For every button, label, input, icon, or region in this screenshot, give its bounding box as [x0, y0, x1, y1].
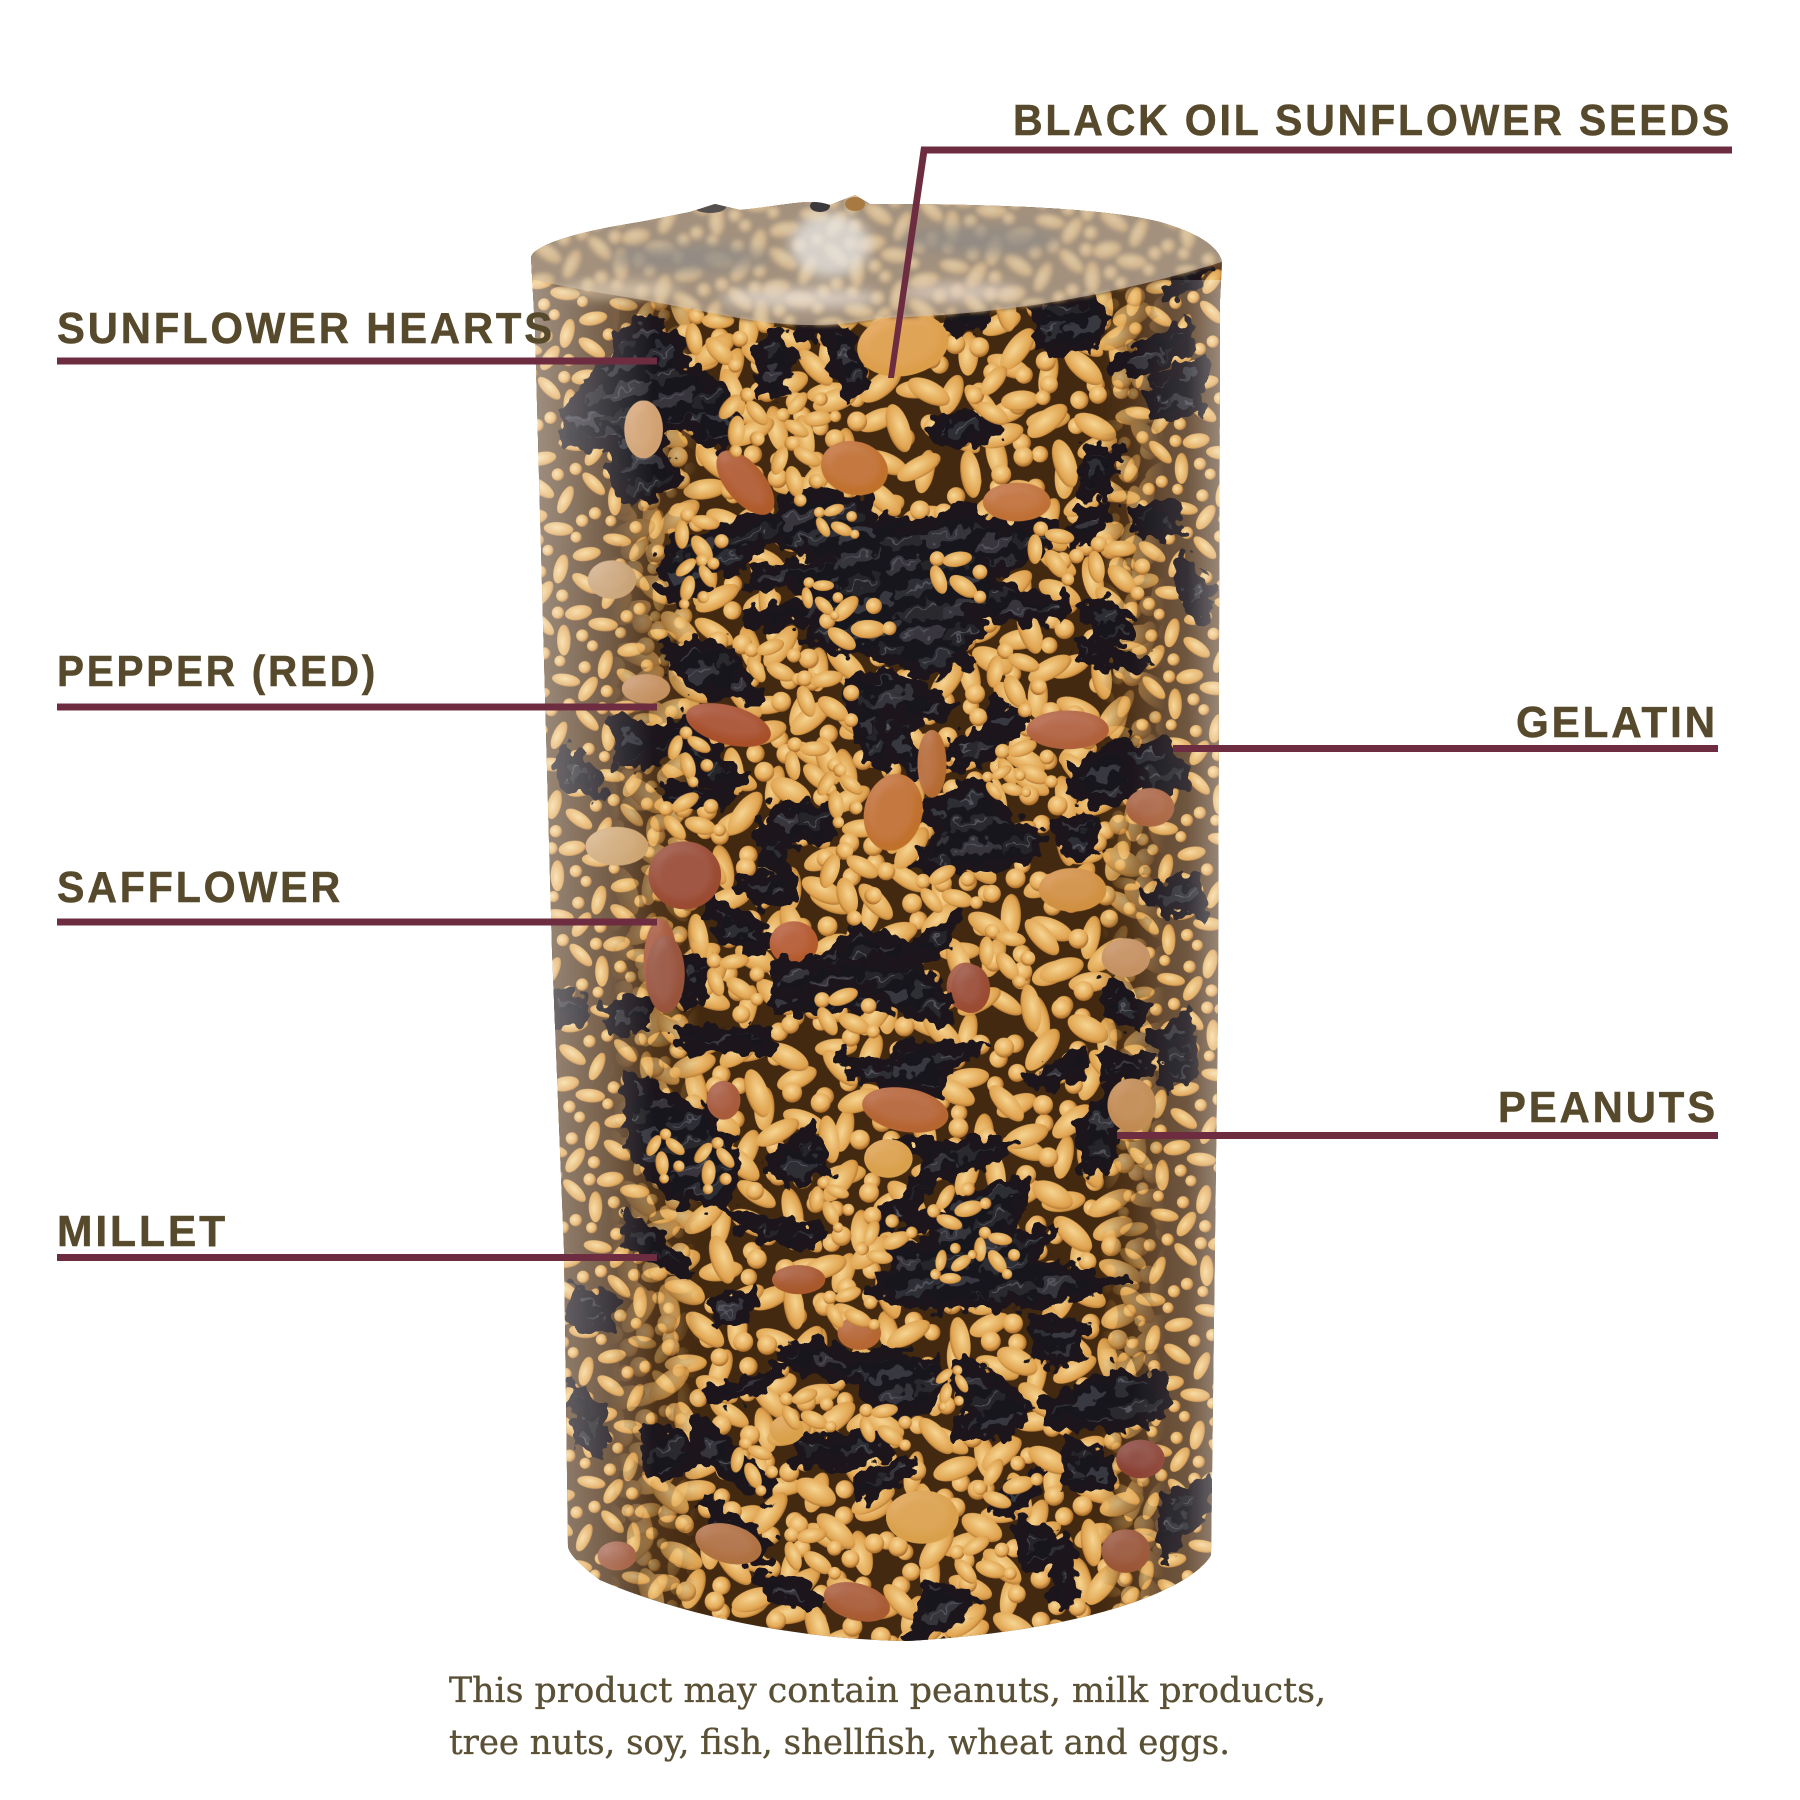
allergen note: [449, 1671, 1326, 1763]
label: pepper (red): [57, 647, 657, 710]
label: peanuts: PEANUTS: [1498, 1083, 1718, 1132]
label: gelatin: [1173, 698, 1718, 752]
golden seeds over black seeds, lower half: [638, 978, 1050, 1589]
top surface of cylinder: [520, 190, 1240, 325]
lower half: seeds, peanuts: [554, 935, 1208, 1638]
golden seed base texture: [520, 195, 1240, 1655]
peanuts, lower half: [598, 935, 1165, 1628]
label: sunflower hearts: SUNFLOWER HEARTS: [57, 304, 555, 353]
label: safflower: [57, 863, 657, 926]
black seed masses, lower half: [554, 960, 1208, 1638]
label: pepper (red): PEPPER (RED): [57, 647, 378, 696]
label: gelatin: GELATIN: [1516, 698, 1718, 747]
golden seeds over black seeds, upper half: [656, 293, 1166, 1015]
left translucent haze: [525, 280, 655, 1660]
black seed masses, upper half: [564, 265, 1208, 1010]
smaller seeds on the left edge: [531, 250, 696, 1612]
label: black oil sunflower seeds: BLACK OIL SUNFLOWER SEEDS: [1013, 96, 1732, 145]
allergen note: This product may contain peanuts, milk products,: [449, 1671, 1326, 1711]
smaller seeds on the right edge: [1104, 250, 1222, 1611]
upper half: seeds, peanuts: [564, 265, 1208, 1015]
label: peanuts: [1117, 1083, 1718, 1139]
seed cylinder photograph: [520, 190, 1240, 1670]
allergen note: tree nuts, soy, fish, shellfish, wheat and eggs.: [449, 1723, 1230, 1763]
label: millet: [57, 1207, 657, 1261]
peanuts, upper half: [585, 305, 1174, 1011]
label: black oil sunflower seeds: [888, 96, 1732, 378]
label: safflower: SAFFLOWER: [57, 863, 343, 912]
right translucent haze: [1130, 280, 1225, 1660]
label: millet: MILLET: [57, 1207, 228, 1256]
